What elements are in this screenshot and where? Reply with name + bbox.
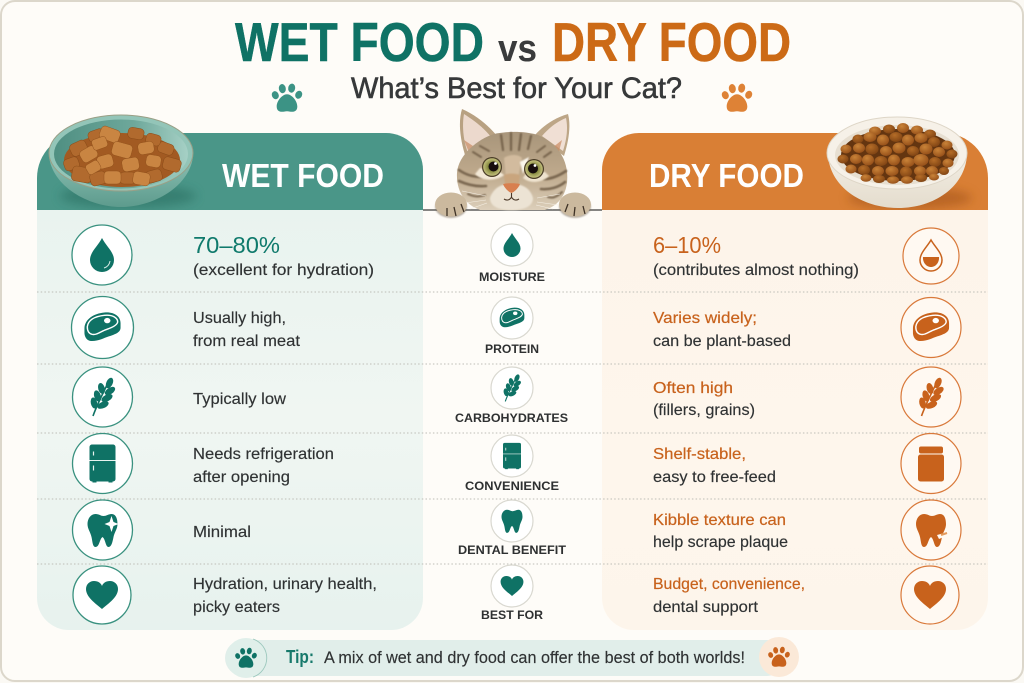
icon: wet wheat xyxy=(72,367,132,427)
label: best for: BEST FOR xyxy=(481,608,543,622)
dry dental text: help scrape plaque xyxy=(653,534,788,551)
center moisture icon xyxy=(491,224,533,266)
label: protein: PROTEIN xyxy=(485,342,539,356)
center protein icon xyxy=(491,297,533,339)
center fridge icon xyxy=(491,435,533,477)
dry moisture text xyxy=(653,232,859,279)
dry carbohydrates text: (fillers, grains) xyxy=(653,402,755,419)
wet convenience text: after opening xyxy=(193,469,290,486)
cat fur stripes xyxy=(459,133,566,198)
dry dental text xyxy=(653,512,788,551)
icon: dry jar xyxy=(901,434,961,494)
label: carbohydrates: CARBOHYDRATES xyxy=(455,411,568,425)
cat face markings xyxy=(475,155,549,210)
dry convenience text: easy to free-feed xyxy=(653,469,776,486)
wet moisture text: (excellent for hydration) xyxy=(193,262,374,279)
subtitle: What’s Best for Your Cat? xyxy=(351,72,682,105)
dry moisture text: 6–10% xyxy=(653,232,721,258)
cat left paw xyxy=(435,192,467,218)
center heart icon xyxy=(491,565,533,607)
panel: dry food xyxy=(602,133,988,630)
wet panel body xyxy=(37,210,423,630)
wet convenience text xyxy=(193,446,334,486)
dry best-for text: Budget, convenience, xyxy=(653,576,805,593)
row: dental benefit xyxy=(72,500,961,560)
cat right paw xyxy=(559,192,591,218)
tip text: Tip: xyxy=(286,647,314,667)
dry carbohydrates text: Often high xyxy=(653,380,733,397)
title: WET FOOD xyxy=(235,11,484,73)
icon: orange paw xyxy=(720,83,754,112)
dry heading: DRY FOOD xyxy=(649,157,804,194)
wet heading: WET FOOD xyxy=(222,157,384,194)
icon: tip orange paw xyxy=(759,637,799,677)
center tooth icon xyxy=(491,500,533,542)
row: convenience xyxy=(72,434,961,494)
icon: dry drop xyxy=(903,228,959,284)
dry best-for text: dental support xyxy=(653,599,759,616)
tip bar xyxy=(225,637,799,678)
wet best-for text: picky eaters xyxy=(193,599,280,616)
label: moisture: MOISTURE xyxy=(479,270,545,284)
icon: dry wheat xyxy=(901,367,961,427)
wet protein text xyxy=(193,310,301,350)
panel: wet food xyxy=(37,133,423,630)
dry panel body xyxy=(602,210,988,630)
image: cat peeking over the line xyxy=(435,109,591,218)
title xyxy=(235,11,791,73)
dry carbohydrates text xyxy=(653,380,755,419)
icon: wet heart xyxy=(73,566,131,624)
wet protein text: from real meat xyxy=(193,333,301,350)
image: bowl of dry food xyxy=(827,117,972,209)
wet convenience text: Needs refrigeration xyxy=(193,446,334,463)
icon: wet tooth xyxy=(72,500,132,560)
dry convenience text xyxy=(653,446,776,486)
label: convenience: CONVENIENCE xyxy=(465,479,559,493)
dry protein text: Varies widely; xyxy=(653,310,757,327)
wet moisture text xyxy=(193,232,374,279)
icon: teal paw xyxy=(270,83,304,112)
dry dental text: Kibble texture can xyxy=(653,512,786,529)
wet best-for text xyxy=(193,576,377,616)
dry convenience text: Shelf-stable, xyxy=(653,446,746,463)
dry protein text: can be plant-based xyxy=(653,333,791,350)
icon: wet drop xyxy=(72,225,132,285)
row: best for xyxy=(73,565,959,624)
icon: wet meat xyxy=(72,296,134,358)
icon: dry tooth xyxy=(901,500,961,560)
wet moisture text: 70–80% xyxy=(193,232,280,258)
row: carbohydrates xyxy=(72,367,961,427)
dry moisture text: (contributes almost nothing) xyxy=(653,262,859,279)
label: dental benefit: DENTAL BENEFIT xyxy=(458,543,567,557)
icon: dry heart xyxy=(901,566,959,624)
icon: dry meat xyxy=(901,298,961,358)
wet protein text: Usually high, xyxy=(193,310,286,327)
dry best-for text xyxy=(653,576,805,616)
wet best-for text: Hydration, urinary health, xyxy=(193,576,377,593)
wet carbohydrates text: Typically low xyxy=(193,391,286,408)
dry panel header xyxy=(602,133,988,210)
row: moisture xyxy=(72,224,959,285)
icon: tip teal paw xyxy=(226,638,267,678)
dry protein text xyxy=(653,310,791,350)
title: vs xyxy=(498,28,537,70)
wet panel header xyxy=(37,133,423,210)
wet dental text: Minimal xyxy=(193,524,251,541)
center wheat icon xyxy=(491,367,533,409)
icon: wet fridge xyxy=(72,434,132,494)
title: DRY FOOD xyxy=(552,11,791,73)
row: protein xyxy=(72,296,961,358)
image: bowl of wet food xyxy=(49,115,196,208)
cat eyes xyxy=(482,157,544,179)
cat nose and mouth xyxy=(462,183,560,209)
tip text: A mix of wet and dry food can offer the best of both worlds! xyxy=(324,649,745,667)
